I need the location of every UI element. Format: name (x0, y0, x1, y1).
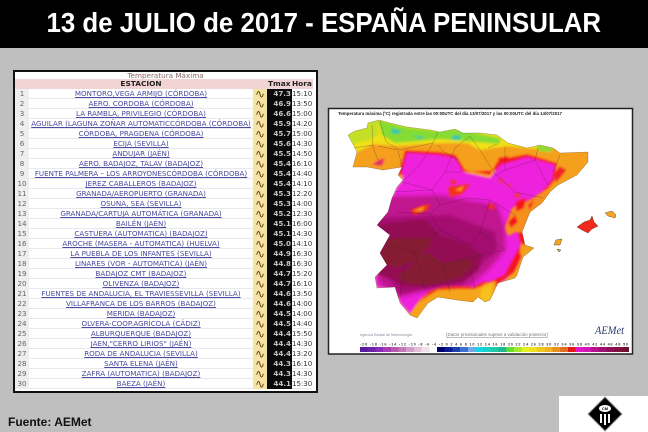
table caption: Temperatura Máxima (127, 71, 204, 80)
table rows: 45.4 (273, 169, 291, 178)
table rows: 14:30 (292, 230, 312, 238)
table rows: 16:30 (292, 250, 312, 258)
table rows: 4 (20, 119, 24, 128)
table rows: 45.6 (273, 139, 291, 148)
map agency credit: Agencia Estatal de Meteorología (360, 333, 413, 337)
table rows: 13:50 (292, 290, 312, 298)
table rows: 15:50 (292, 330, 312, 338)
colour scale legend (360, 342, 629, 352)
table rows: 6 (20, 139, 24, 148)
table rows: 15 (17, 229, 27, 238)
table rows: 24 (17, 319, 27, 328)
table header row: Hora (292, 79, 312, 88)
table rows: 13:20 (292, 350, 312, 358)
table rows: 45.1 (273, 229, 291, 238)
table rows: 12 (17, 199, 27, 208)
title banner (0, 0, 648, 48)
table rows: 2 (20, 99, 24, 108)
table header row: ESTACION (120, 79, 162, 88)
table rows: 16:30 (292, 260, 312, 268)
map frame (328, 108, 632, 354)
table rows: 23 (17, 309, 27, 318)
table rows: 44.4 (273, 349, 291, 358)
table rows: VILLAFRANCA DE LOS BARROS (BADAJOZ) (66, 299, 216, 308)
table rows: BAILÉN (JAÉN) (116, 219, 166, 228)
table rows: ANDUJAR (JAÉN) (112, 149, 170, 158)
table rows: 8 (20, 159, 24, 168)
table rows: 16 (17, 239, 27, 248)
table rows: MERIDA (BADAJOZ) (107, 309, 175, 318)
table rows: 13:50 (292, 100, 312, 108)
table rows: LINARES (VOR - AUTOMATICA) (JAÉN) (75, 259, 207, 268)
table rows: 1 (20, 89, 24, 98)
table rows: FUENTES DE ANDALUCIA, EL TRAVIESSEVILLA (SEVILLA) (41, 289, 241, 298)
table rows: ECIJA (SEVILLA) (113, 139, 169, 148)
table rows: LA PUEBLA DE LOS INFANTES (SEVILLA) (70, 249, 212, 258)
table rows: 17 (17, 249, 27, 258)
colour scale legend: -20 -18 -16 -14 -12 -10 -8 -6 -4 -2 0 2 4 6 8 10 12 14 16 18 20 22 24 26 28 30 32 34 36 38 40 42 44 46 48 50 (360, 342, 628, 346)
table rows: 14:00 (292, 200, 312, 208)
table rows: 15:00 (292, 110, 312, 118)
table rows: 15:00 (292, 130, 312, 138)
table rows: 14:00 (292, 310, 312, 318)
table rows: 45.3 (273, 189, 291, 198)
table rows: 14:30 (292, 340, 312, 348)
table rows: SANTA ELENA (JAÉN) (104, 359, 178, 368)
table rows: 3 (20, 109, 24, 118)
table rows: ZAFRA (AUTOMATICA) (BADAJOZ) (82, 369, 200, 378)
table rows: OSUNA, SEA (SEVILLA) (101, 199, 181, 208)
table rows: 16:10 (292, 280, 312, 288)
table rows: 21 (17, 289, 27, 298)
table rows: 44.7 (273, 269, 291, 278)
table rows: MONTORO,VEGA ARMIJO (CÓRDOBA) (75, 89, 207, 98)
table rows: 30 (17, 379, 27, 388)
map caption: Temperatura máxima (ºC) registrada entre las 00:00UTC del día 13/07/2017 y las 00:00UTC del día 14/07/2017 (338, 111, 563, 116)
table rows: 45.1 (273, 219, 291, 228)
table rows: 11 (17, 189, 27, 198)
table rows: OLIVENZA (BADAJOZ) (103, 279, 179, 288)
source credit: Fuente: AEMet (8, 415, 92, 429)
table rows: 45.3 (273, 199, 291, 208)
title banner: 13 de JULIO de 2017 - ESPAÑA PENINSULAR (47, 7, 601, 38)
table rows: 12:20 (292, 190, 312, 198)
panel: temperature map (8, 108, 648, 432)
table rows: 44.7 (273, 279, 291, 288)
table rows: 15:30 (292, 380, 312, 388)
table rows: JAEN,"CERRO LIRIOS" (JAÉN) (91, 339, 191, 348)
Balearic islands (554, 211, 616, 252)
table rows: 15:10 (292, 90, 312, 98)
table header row: Tmax (268, 79, 290, 88)
table rows: 45.0 (273, 239, 291, 248)
AEMet logo: AEMet (594, 323, 625, 337)
table rows: 44.3 (273, 359, 291, 368)
table rows: 27 (17, 349, 27, 358)
table rows: 15:20 (292, 270, 312, 278)
table rows: 12:30 (292, 210, 312, 218)
table rows: 14 (17, 219, 27, 228)
table rows: 14:10 (292, 240, 312, 248)
table rows: 44.9 (273, 249, 291, 258)
table rows: 47.3 (273, 89, 291, 98)
table rows: AERO. CORDOBA (CÓRDOBA) (88, 99, 194, 108)
table rows: 25 (17, 329, 27, 338)
table rows: 44.4 (273, 329, 291, 338)
table rows: 44.1 (273, 379, 291, 388)
table rows: 46.6 (273, 109, 291, 118)
table rows: AERO. BADAJOZ, TALAV (BADAJOZ) (79, 159, 203, 168)
table rows: 14:10 (292, 180, 312, 188)
table rows: 20 (17, 279, 27, 288)
table rows: FUENTE PALMERA – LOS ARROYONESCÓRDOBA (CÓRDOBA) (35, 169, 247, 178)
table rows: JEREZ CABALLEROS (BADAJOZ) (86, 179, 196, 188)
map of peninsular Spain (340, 115, 616, 325)
table rows: 13 (17, 209, 27, 218)
table rows: 28 (17, 359, 27, 368)
table rows: 44.5 (273, 319, 291, 328)
table rows: AGUILAR (LAGUNA ZOÑAR AUTOMATICCÓRDOBA (CÓRDOBA) (31, 119, 251, 128)
table rows: 16:10 (292, 360, 312, 368)
table rows: GRANADA/AEROPUERTO (GRANADA) (76, 189, 206, 198)
table rows: BAEZA (JAÉN) (117, 379, 165, 388)
table rows: 14:20 (292, 120, 312, 128)
table rows: 44.6 (273, 289, 291, 298)
table rows: 44.4 (273, 339, 291, 348)
table rows: BADAJOZ CMT (BADAJOZ) (96, 269, 186, 278)
table rows: 45.4 (273, 159, 291, 168)
table rows: 14:40 (292, 320, 312, 328)
table rows: 18 (17, 259, 27, 268)
table rows: 5 (20, 129, 24, 138)
table rows: 16:10 (292, 160, 312, 168)
table rows: 10 (17, 179, 27, 188)
table rows: 14:30 (292, 140, 312, 148)
table rows: 14:30 (292, 370, 312, 378)
table rows: 45.2 (273, 209, 291, 218)
table rows: 44.3 (273, 369, 291, 378)
table rows: 19 (17, 269, 27, 278)
icon: diamond emblem: CM (602, 406, 609, 411)
table rows: GRANADA/CARTUJA AUTOMÁTICA (GRANADA) (60, 209, 222, 218)
table rows: 45.5 (273, 149, 291, 158)
table rows: 29 (17, 369, 27, 378)
provisional data note: (Datos provisionales sujetos a validación posterior) (446, 332, 548, 337)
table rows: OLVERA-COOP.AGRÍCOLA (CÁDIZ) (81, 319, 201, 328)
table rows: CÓRDOBA, PRAGDENA (CÓRDOBA) (79, 129, 203, 138)
table rows: 45.7 (273, 129, 291, 138)
table rows: 44.8 (273, 259, 291, 268)
table rows: 45.9 (273, 119, 291, 128)
table rows: 45.4 (273, 179, 291, 188)
table rows: RODA DE ANDALUCIA (SEVILLA) (84, 349, 198, 358)
table rows: AROCHE (MASERA - AUTOMATICA) (HUELVA) (62, 239, 220, 248)
table rows: 14:00 (292, 300, 312, 308)
table rows: 22 (17, 299, 27, 308)
table rows: 44.6 (273, 299, 291, 308)
table rows: ALBURQUERQUE (BADAJOZ) (91, 329, 191, 338)
panel: station temperature table (13, 70, 318, 393)
table rows: 9 (20, 169, 24, 178)
table rows: 16:00 (292, 220, 312, 228)
table rows: 26 (17, 339, 27, 348)
table rows: LA RAMBLA, PRIVILEGIO (CÓRDOBA) (76, 109, 206, 118)
logo box (559, 396, 648, 432)
table rows: 14:50 (292, 150, 312, 158)
table rows: 46.9 (273, 99, 291, 108)
table rows: 7 (20, 149, 24, 158)
table rows: 14:40 (292, 170, 312, 178)
table rows (15, 89, 313, 389)
table rows: CASTUERA (AUTOMATICA) (BADAJOZ) (74, 229, 208, 238)
table header row (15, 79, 313, 89)
table rows: 44.5 (273, 309, 291, 318)
